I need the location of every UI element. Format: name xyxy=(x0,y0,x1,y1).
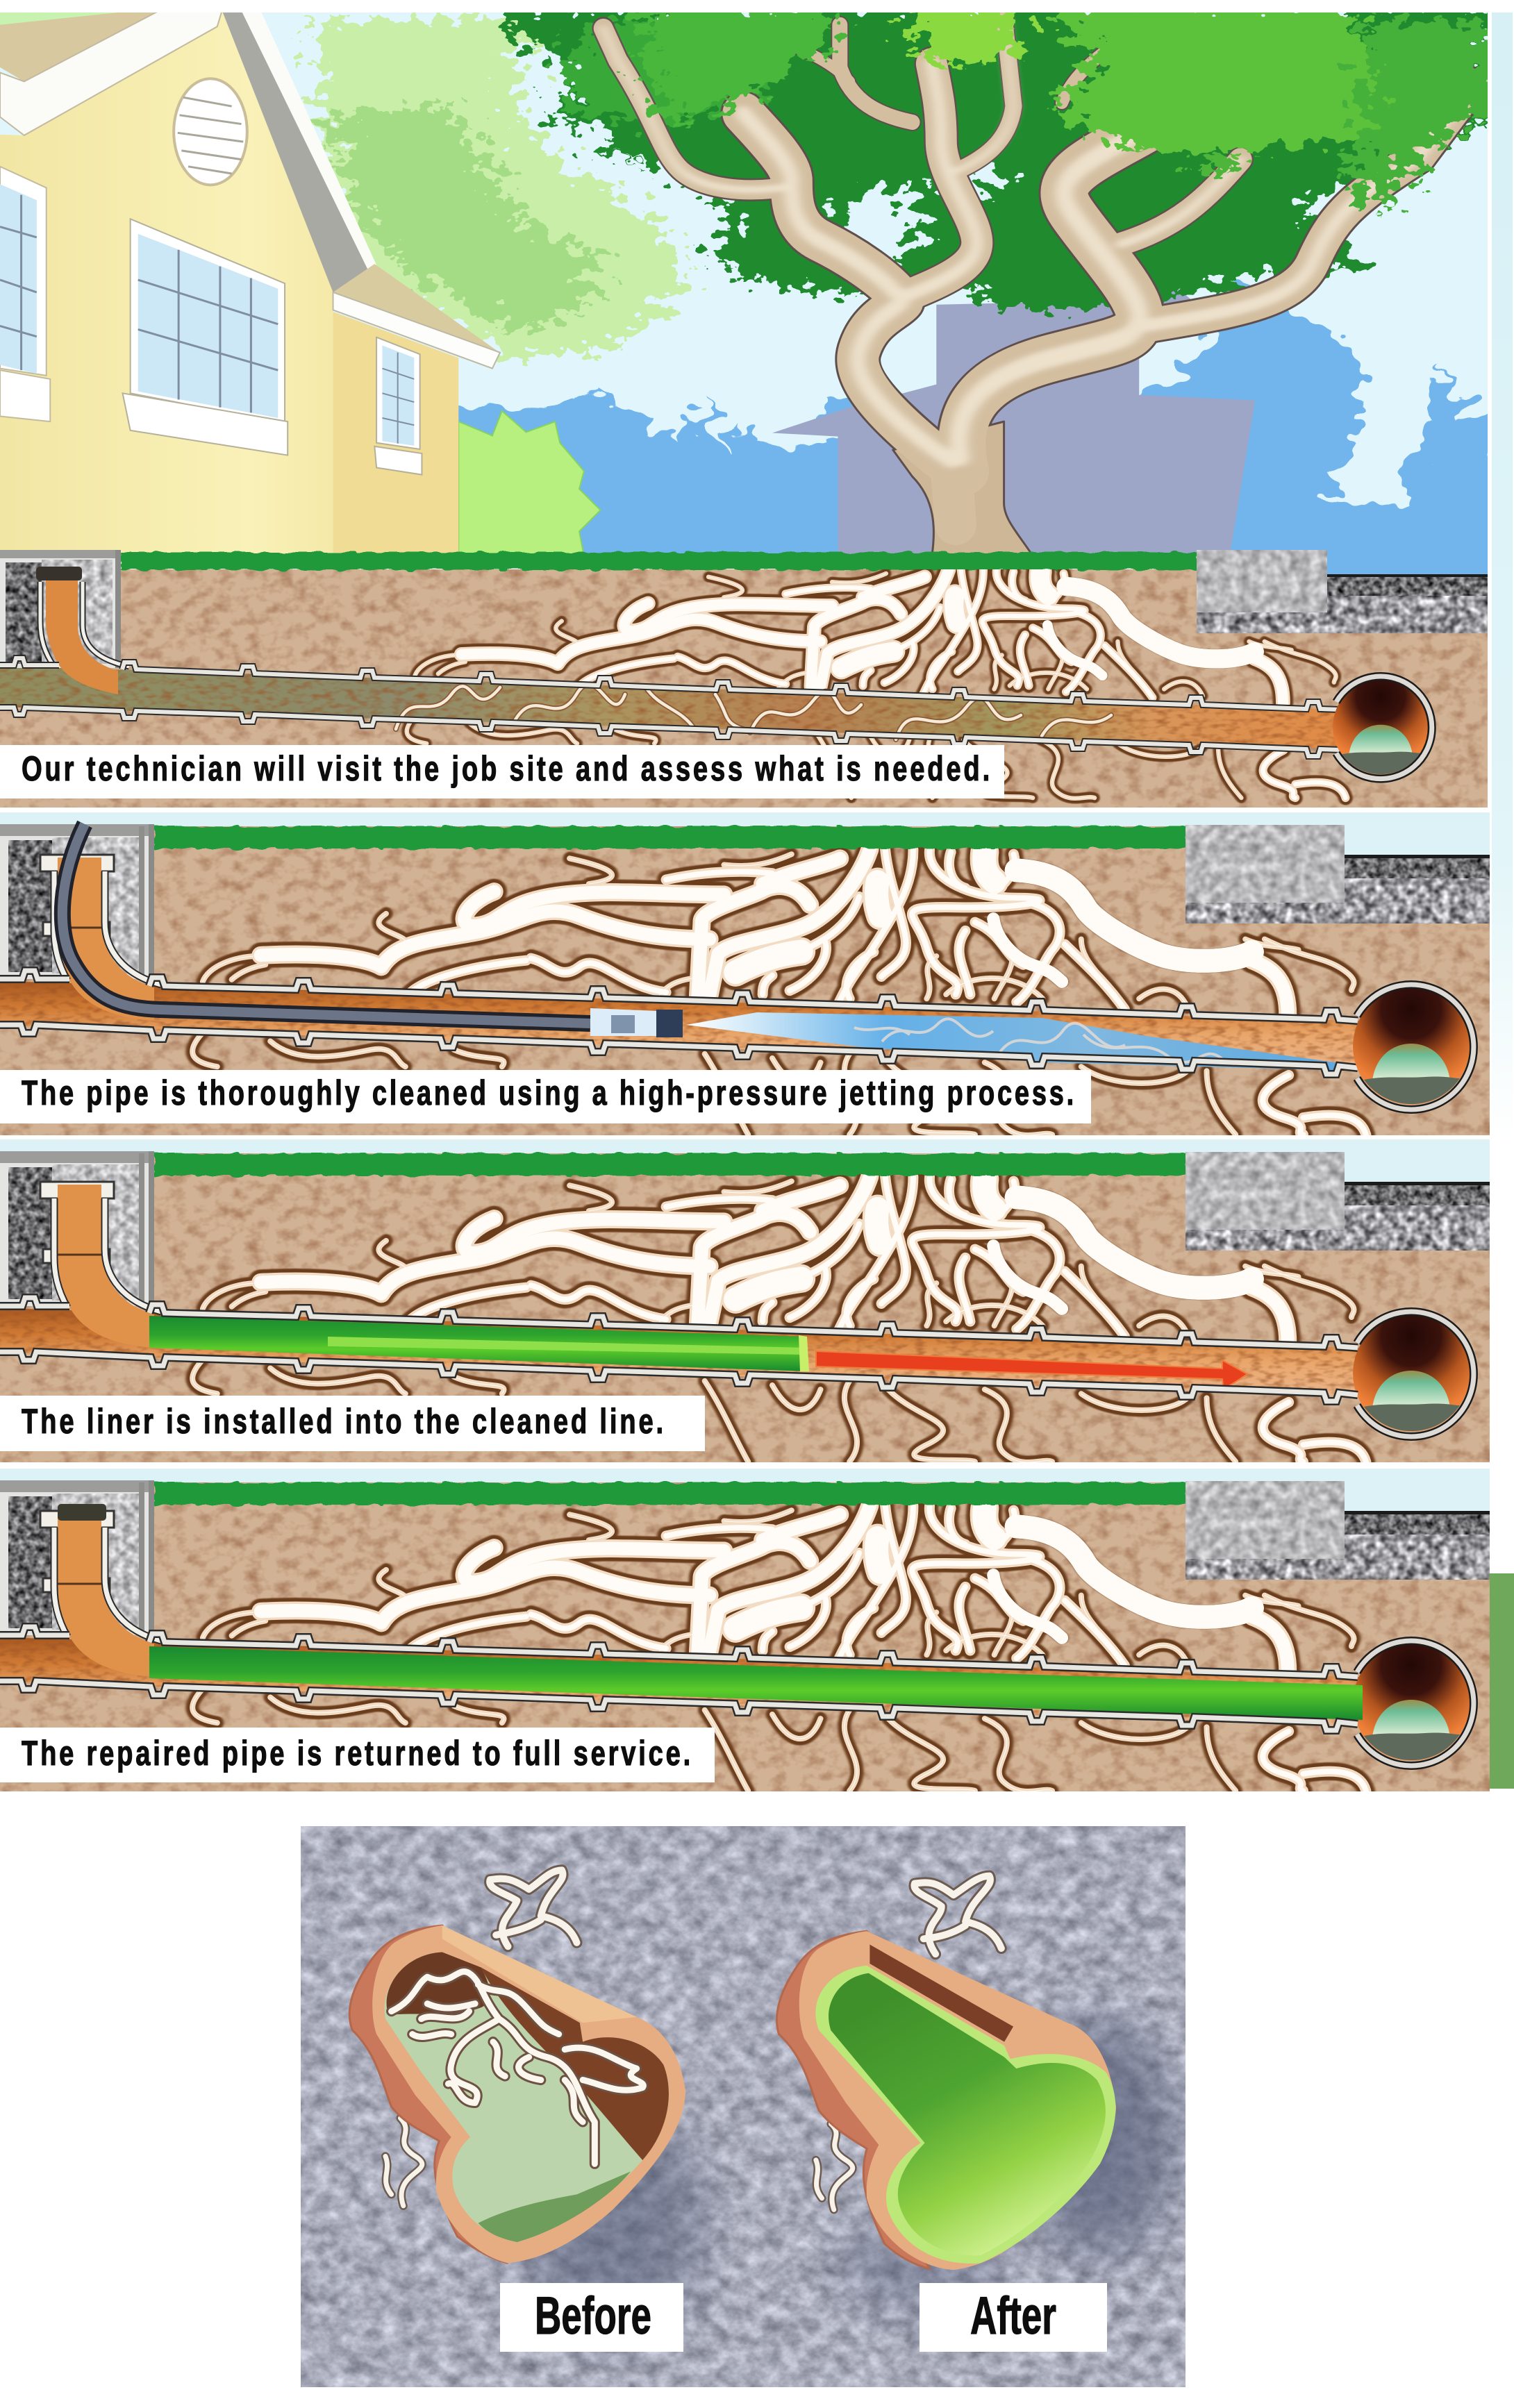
caption: step 1: Our technician will visit the job site and assess what is needed. xyxy=(22,749,992,788)
panel: side green strip xyxy=(1490,1573,1514,1789)
tree roots xyxy=(407,570,1345,799)
pipe before xyxy=(349,1870,685,2263)
tree trunk and branches xyxy=(604,14,1472,581)
riser cap xyxy=(58,1504,106,1521)
background shrubs and neighbouring house xyxy=(458,279,1488,554)
soil and surface xyxy=(0,549,1488,808)
caption: step 1 xyxy=(0,745,1004,799)
caption: step 2: The pipe is thoroughly cleaned using a high-pressure jetting process. xyxy=(22,1073,1076,1112)
red arrow xyxy=(816,1351,1247,1389)
caption: step 3: The liner is installed into the cleaned line. xyxy=(22,1402,666,1441)
jet nozzle xyxy=(590,1008,683,1037)
green liner xyxy=(149,1316,809,1371)
panel: step 3 liner install xyxy=(0,1139,1490,1462)
panel: before and after comparison xyxy=(301,1826,1186,2387)
water spray xyxy=(686,1012,1354,1071)
tree foliage back xyxy=(507,7,1506,312)
lateral pipe end opening xyxy=(1333,676,1432,779)
panel: house and tree scene xyxy=(0,0,1506,581)
shadows xyxy=(521,2021,1174,2340)
roots inside before pipe xyxy=(392,1971,643,2164)
label: Before xyxy=(500,2283,683,2352)
roots outside after pipe xyxy=(816,1876,1001,2209)
panel: step 4 returned to service xyxy=(0,1469,1490,1791)
clogged pipe xyxy=(0,667,1340,749)
caption: step 3 xyxy=(0,1396,705,1451)
caption: step 4: The repaired pipe is returned to full service. xyxy=(22,1734,693,1773)
panel: step 2 jetting xyxy=(0,812,1490,1135)
caption: step 4 xyxy=(0,1728,715,1782)
house xyxy=(0,0,500,581)
jetting hose xyxy=(63,824,590,1023)
label: After: After xyxy=(970,2286,1056,2346)
manhole and riser xyxy=(0,550,129,694)
green liner xyxy=(149,1646,1363,1720)
roots outside before pipe xyxy=(385,1870,576,2206)
sky xyxy=(0,12,1488,509)
background tree xyxy=(319,14,688,361)
panel: step 1 assessment xyxy=(0,549,1488,808)
tree roots xyxy=(192,849,1366,1135)
lateral pipe end opening xyxy=(1353,1641,1474,1766)
label: Before: Before xyxy=(535,2286,651,2346)
lateral pipe end opening xyxy=(1353,1312,1474,1437)
caption: step 2 xyxy=(0,1070,1091,1123)
pipe walls xyxy=(0,658,1340,756)
pipe after xyxy=(776,1876,1116,2270)
tree foliage front xyxy=(642,7,1506,212)
bush xyxy=(458,410,601,553)
lateral pipe end opening xyxy=(1353,985,1474,1110)
label: After xyxy=(920,2283,1107,2352)
panel: pale sky side strip xyxy=(1492,12,1513,1141)
